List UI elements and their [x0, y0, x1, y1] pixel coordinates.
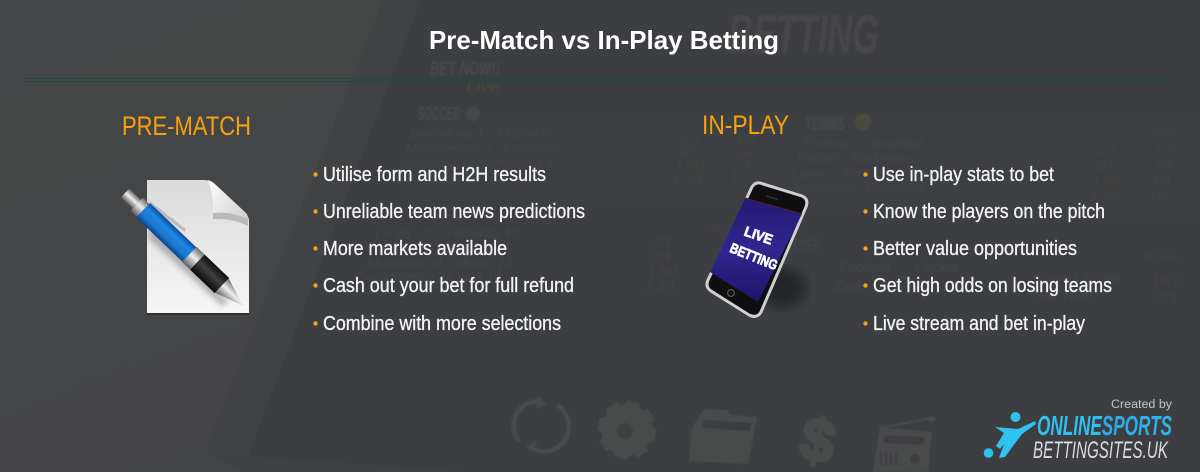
ghost odds columns: 3/1: [678, 143, 697, 159]
icon: folder: [689, 409, 757, 464]
ghost lower-right rows: Correct Score: [1033, 269, 1120, 285]
icon: footballer: [984, 412, 1036, 458]
ghost odds columns: 2/1: [652, 234, 672, 250]
ghost tennis rows: Dimitrenko - Ramonez: [787, 179, 926, 195]
panel: in-play: [702, 110, 1112, 335]
ghost soccer rows: Barcelona 1 - Malina 0: [410, 125, 550, 141]
ghost heading: tennis: TENNIS: [805, 114, 845, 134]
list item: Know the players on the pitch: [873, 201, 1105, 223]
ghost soccer rows: Munich 2 - Leverkusen 1: [400, 154, 553, 170]
ghost odds columns: 3/1: [1095, 157, 1114, 173]
ghost heading: soccer: SOCCER: [418, 104, 460, 124]
ghost odds columns: 1/4: [733, 145, 753, 161]
ghost soccer rows: Sacramento 22 - LA 14: [358, 268, 502, 284]
ghost odds columns: [645, 129, 1179, 306]
ghost odds columns: 1/3: [731, 159, 751, 175]
ghost heading: bet now: BET NOW!!: [430, 59, 500, 80]
ghost tennis rows: Lopes - Pospisil: [792, 165, 892, 181]
ghost soccer rows: Manchester 3 - Leicester 2: [406, 140, 572, 156]
ghost odds columns: 1/4: [1153, 157, 1173, 173]
icon: document with pen: [118, 180, 254, 315]
ghost tennis ball: [854, 114, 872, 130]
ghost odds columns: 1.8/1: [675, 157, 706, 173]
ghost label: live: Live: [466, 79, 500, 96]
ghost tennis rows: Rafael - Raducanu: [797, 150, 914, 166]
phone screen text: BETTING: [728, 240, 780, 273]
ghost odds columns: 1.2/1: [672, 171, 703, 187]
ghost heading: betting: BETTING: [728, 3, 879, 65]
bottom ghost icons: [514, 396, 935, 472]
ghost lower-right rows: Half Time: [1033, 287, 1093, 303]
ghost odds columns: 3/4: [651, 249, 671, 265]
title: Pre-Match vs In-Play Betting: [429, 25, 779, 55]
list item: Combine with more selections: [323, 313, 561, 335]
ghost lower-right rows: Cricket: [915, 259, 960, 275]
icon: smartphone live betting: [707, 183, 807, 316]
ghost lower-right rows: [835, 259, 1120, 303]
ghost odds columns: 2/1: [1096, 142, 1116, 158]
icon: refresh: [514, 396, 569, 452]
ghost odds columns: 1/5: [735, 131, 755, 147]
ghost odds columns: 1.8/1: [648, 264, 679, 280]
phone screen text: [728, 223, 780, 273]
ghost betting-site screenshot: [358, 3, 1187, 306]
list item: More markets available: [323, 238, 507, 260]
list item: Live stream and bet in-play: [873, 313, 1085, 335]
ghost labels: more: more...: [1143, 249, 1187, 265]
ghost soccer rows: Memphis 34 - Miami 18: [367, 254, 513, 270]
heading: in-play: IN-PLAY: [702, 110, 789, 140]
ghost odds columns: 1/2: [729, 173, 749, 189]
ghost labels: more: more: [705, 219, 737, 235]
ghost odds columns: 1.2/1: [645, 278, 676, 294]
divider double line: [24, 78, 1168, 82]
ghost odds columns: 14/1: [1152, 271, 1179, 287]
heading: pre-match: PRE-MATCH: [122, 111, 251, 141]
logo: online sports betting sites: [984, 399, 1172, 464]
ghost soccer rows: LA 98 - Sacramento 45: [375, 225, 519, 241]
ghost odds columns: 2/1: [681, 129, 701, 145]
ghost odds columns: 1/5: [1155, 142, 1175, 158]
panel: pre-match: [118, 111, 585, 335]
icon: gear: [593, 396, 661, 464]
list: in-play points: [863, 164, 1112, 335]
list item: Use in-play stats to bet: [873, 164, 1054, 186]
list item: Get high odds on losing teams: [873, 275, 1112, 297]
phone screen text: LIVE: [742, 223, 775, 248]
ghost odds columns: 1.2/1: [1090, 187, 1121, 203]
ghost odds columns: 1/2: [1149, 187, 1169, 203]
ghost betting-site screenshot: SOCCER: [782, 236, 820, 256]
list item: Better value opportunities: [873, 238, 1077, 260]
list: pre-match points: [313, 164, 585, 335]
ghost odds columns: 12/1: [1150, 290, 1177, 306]
ghost tennis rows: [787, 135, 926, 195]
ghost lower-right rows: Darts: [835, 278, 868, 294]
list item: Unreliable team news predictions: [323, 201, 585, 223]
ghost odds columns: 1/3: [1151, 172, 1171, 188]
list item: Cash out your bet for full refund: [323, 275, 574, 297]
ghost lower-right rows: Football: [840, 259, 891, 275]
icon: radio: [873, 416, 935, 472]
ghost soccer rows: Miami 67 - Chicago 21: [370, 240, 510, 256]
ghost labels: more: more..: [1147, 122, 1187, 138]
ghost odds columns: 1.8/1: [1092, 172, 1123, 188]
list item: Utilise form and H2H results: [323, 164, 546, 186]
ghost tennis rows: Thomas - Gonzalez: [802, 135, 924, 151]
ghost labels: more: [705, 122, 1187, 265]
ghost soccer rows: [358, 125, 572, 284]
credit text: Created by: [1111, 399, 1172, 411]
ghost soccer ball: [466, 107, 480, 121]
